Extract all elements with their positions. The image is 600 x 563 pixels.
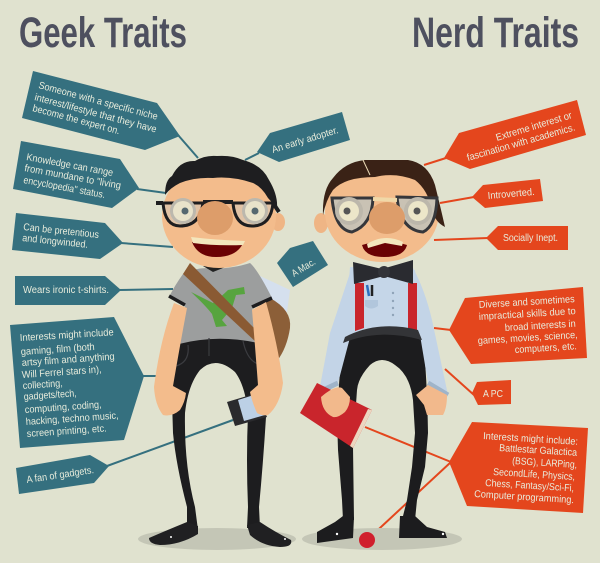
callout: ironic t-shirts: Wears ironic t-shirts. xyxy=(23,285,109,296)
callout: ironic t-shirts xyxy=(15,276,173,305)
belt xyxy=(343,326,422,343)
callout: early adopter xyxy=(245,112,350,162)
callout: knowledge range: encyclopedia" status. xyxy=(22,175,106,201)
character: geek xyxy=(138,156,296,550)
nose xyxy=(197,201,233,235)
teeth xyxy=(367,238,403,248)
callout: geek interests: hacking, techno music, xyxy=(25,411,119,428)
callout: socially inept: Socially Inept. xyxy=(503,233,558,244)
shirt xyxy=(344,267,422,340)
left arm xyxy=(154,303,187,415)
left hand xyxy=(321,387,350,417)
callout: diverse skills: computers, etc. xyxy=(515,341,577,356)
bag strap xyxy=(183,263,258,343)
left shoe xyxy=(317,516,354,543)
ground shadow xyxy=(138,528,296,550)
callout: nerd interests xyxy=(365,422,588,540)
right sleeve xyxy=(410,268,448,395)
hair parting xyxy=(363,160,370,175)
neck xyxy=(203,266,228,272)
callout: nerd interests: Computer programming. xyxy=(474,489,574,506)
callout: extreme interest: Extreme interest or xyxy=(495,110,574,144)
callout: a Mac: A Mac. xyxy=(290,257,318,280)
right shoe xyxy=(399,516,447,538)
callout: geek interests: Will Ferrel stars in), xyxy=(21,364,102,381)
callout: geek interests: gadgets/tech, xyxy=(23,388,77,403)
bow tie xyxy=(353,260,413,284)
trousers xyxy=(338,333,428,520)
callout: geek interests: collecting, xyxy=(22,378,63,392)
callout: knowledge range: Knowledge can range xyxy=(25,152,114,179)
callout: fan of gadgets xyxy=(16,420,233,494)
callout: pretentious: and longwinded. xyxy=(22,233,88,251)
callout: extreme interest: fascination with academics. xyxy=(466,122,576,164)
hair xyxy=(165,156,277,208)
callout: geek interests: computing, coding, xyxy=(24,400,102,416)
callout: a PC: A PC xyxy=(483,389,503,400)
callout: diverse skills xyxy=(434,287,587,364)
callout: diverse skills: broad interests in xyxy=(505,319,576,334)
callout: niche interest: Someone with a specific niche xyxy=(37,80,159,123)
dinosaur print xyxy=(191,287,245,327)
callout: introverted: Introverted. xyxy=(487,187,535,202)
mouth xyxy=(362,242,407,257)
right arm xyxy=(250,302,283,415)
callout: nerd interests: (BSG), LARPing, xyxy=(512,456,577,471)
callout: knowledge range: from mundane to "living xyxy=(23,163,122,192)
glasses xyxy=(156,198,279,226)
ear xyxy=(314,213,328,233)
callout: fan of gadgets: A fan of gadgets. xyxy=(26,465,95,486)
phone xyxy=(227,393,267,426)
hair xyxy=(323,160,445,227)
mouth xyxy=(192,241,244,257)
ear xyxy=(271,213,285,231)
callout: extreme interest xyxy=(424,100,586,169)
right shoe xyxy=(247,522,291,547)
callout: introverted xyxy=(440,179,543,208)
callout: diverse skills: games, movies, science, xyxy=(478,330,578,347)
trouser pockets xyxy=(176,338,258,366)
callout: early adopter: An early adopter. xyxy=(271,125,340,156)
callout: geek interests: artsy film and anything xyxy=(21,352,115,369)
callout: pretentious: Can be pretentious xyxy=(23,222,99,241)
left shoe xyxy=(149,522,198,545)
laptop in bag xyxy=(258,275,290,320)
callout: nerd interests: SecondLife, Physics, xyxy=(493,467,575,483)
head xyxy=(325,162,439,262)
callout: diverse skills: Diverse and sometimes xyxy=(479,294,575,311)
shirt buttons xyxy=(392,292,394,316)
ground shadow xyxy=(302,528,462,550)
teeth xyxy=(191,237,245,245)
callout: nerd interests: Chess, Fantasy/Sci-Fi, xyxy=(485,478,574,494)
callout: a Mac xyxy=(277,241,328,287)
shirt pocket with pens xyxy=(365,285,378,308)
callout: nerd interests: Interests might include: xyxy=(483,431,578,448)
callout: socially inept xyxy=(434,226,568,250)
callout: niche interest xyxy=(22,71,198,158)
sleeve cuffs xyxy=(169,296,272,307)
trousers xyxy=(172,339,266,530)
left sleeve xyxy=(319,267,356,392)
callout: geek interests: gaming, film (both xyxy=(20,342,95,358)
nose xyxy=(369,202,405,234)
callout: knowledge range xyxy=(13,141,166,208)
ball xyxy=(359,532,375,548)
title: Geek Traits: Geek Traits xyxy=(19,9,187,57)
glasses xyxy=(332,197,437,232)
callout: niche interest: interest/lifestyle that they have xyxy=(33,92,158,136)
character: nerd xyxy=(300,160,462,550)
head xyxy=(162,164,276,268)
messenger bag xyxy=(258,298,290,361)
callout: geek interests: Interests might include xyxy=(20,327,114,344)
callout: pretentious xyxy=(12,213,173,259)
right hand xyxy=(416,385,447,415)
callout: a PC xyxy=(445,369,511,405)
callout: niche interest: become the expert on. xyxy=(31,103,121,137)
t-shirt xyxy=(169,263,272,346)
shirt cuffs xyxy=(319,383,448,395)
callout: geek interests xyxy=(10,317,157,448)
callout: geek interests: screen printing, etc. xyxy=(26,423,107,440)
suspenders xyxy=(355,283,417,331)
callout: nerd interests: Battlestar Galactica xyxy=(499,443,578,459)
book xyxy=(300,383,372,448)
callout: diverse skills: impractical skills due to xyxy=(479,306,576,323)
